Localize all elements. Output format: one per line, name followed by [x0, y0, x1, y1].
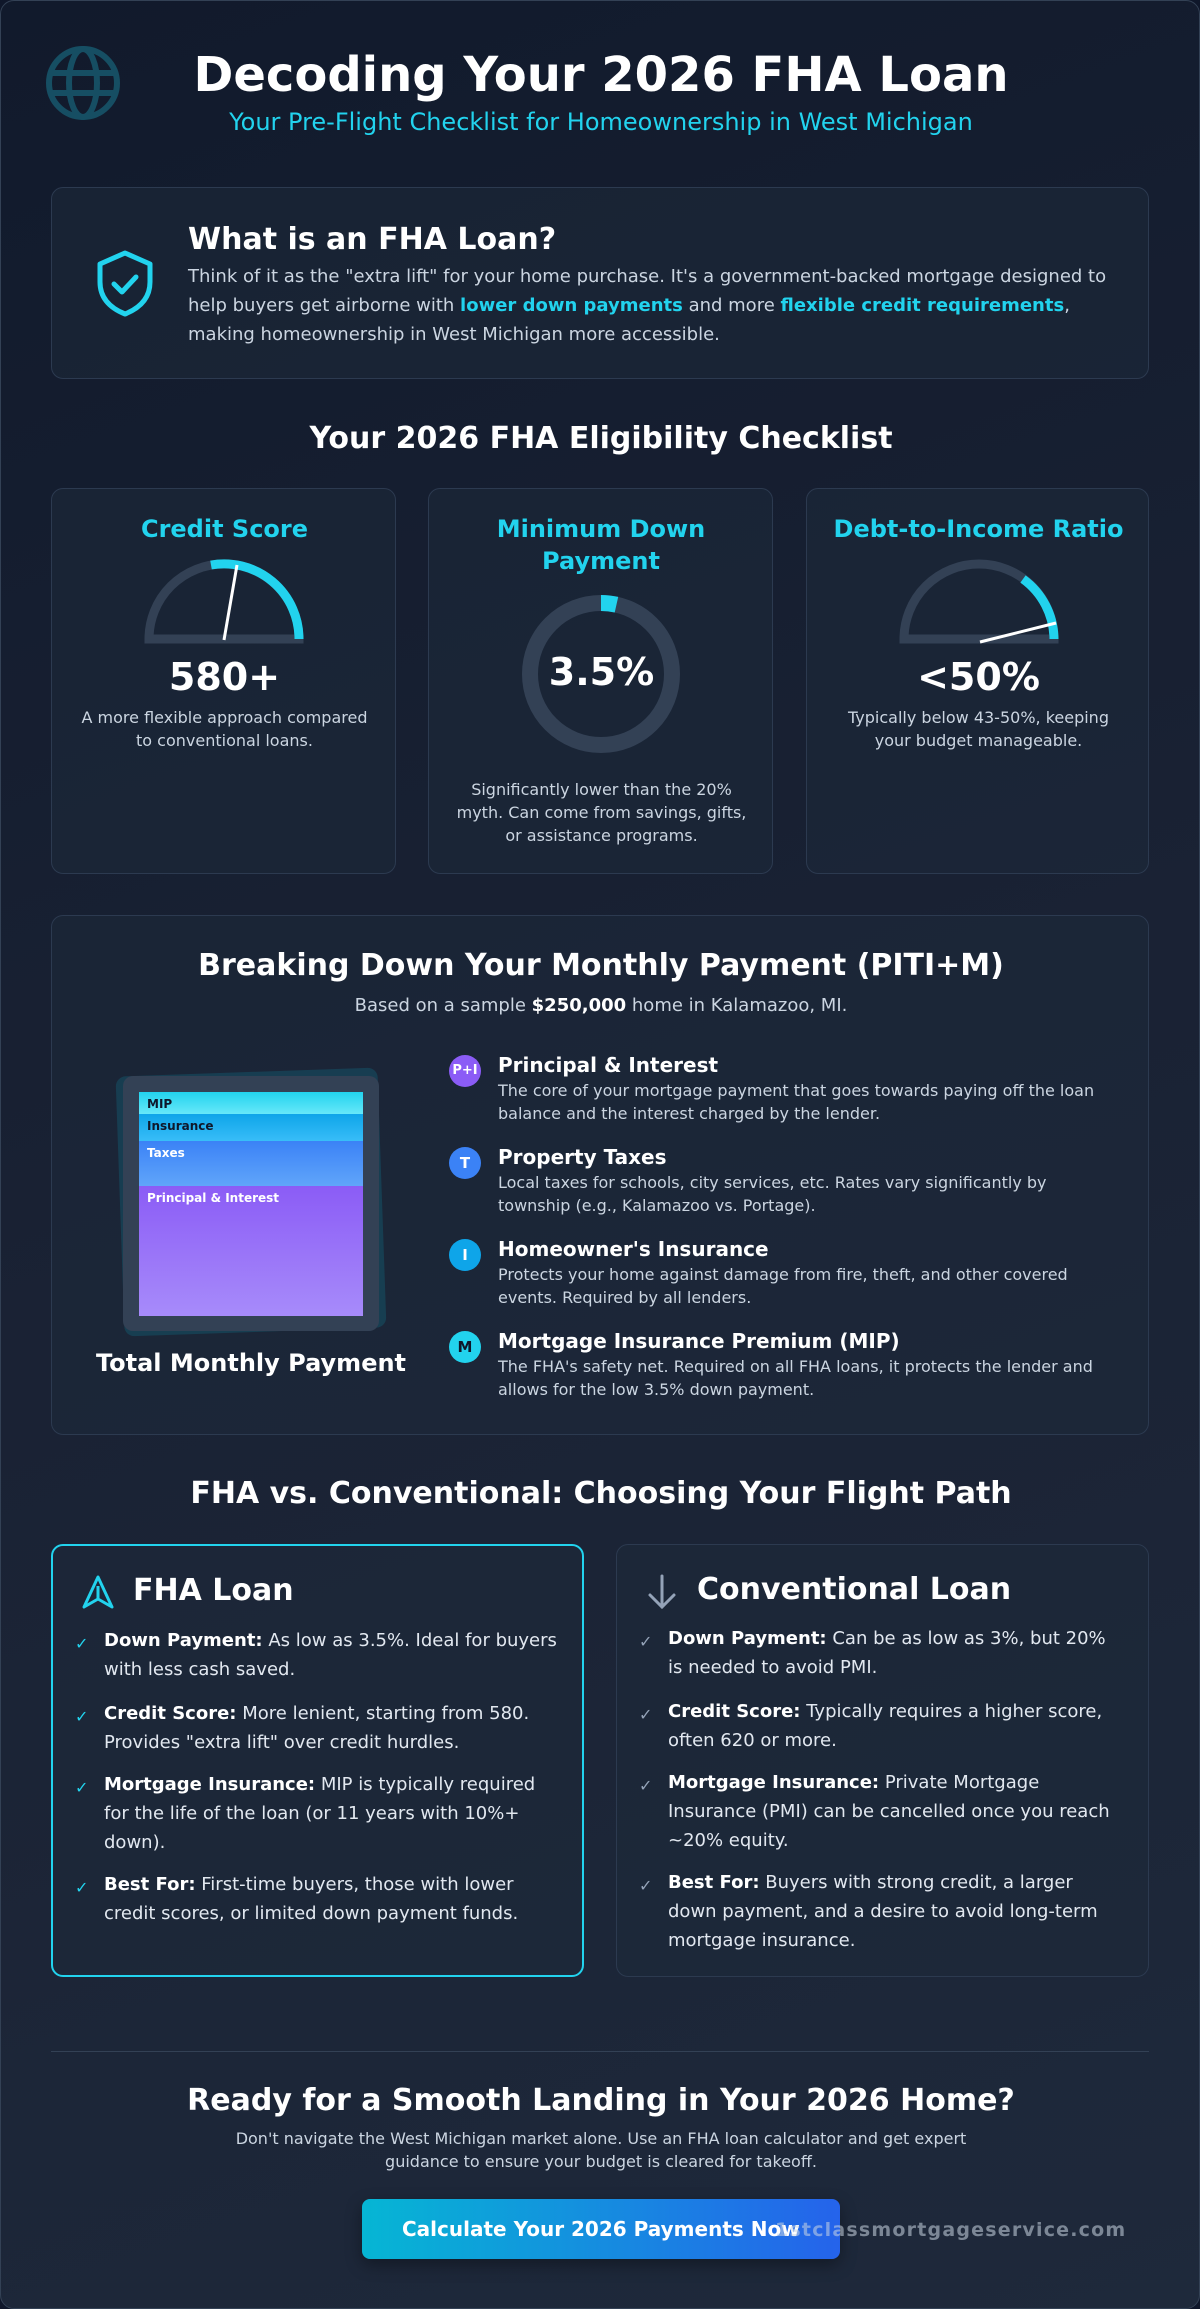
panel: conventional loan — [616, 1544, 1149, 1977]
stacked payment chart: MIP — [147, 1097, 172, 1111]
list item: property taxes: Local taxes for schools, city services, etc. Rates vary significantly by township (e.g., Kalamazoo vs. Portage). — [498, 1173, 1046, 1215]
items: ✓ — [75, 1707, 88, 1726]
icon: plane — [82, 1576, 114, 1609]
card title: Credit Score — [141, 515, 308, 543]
items — [75, 1630, 557, 1924]
heading: comparison: FHA vs. Conventional: Choosing Your Flight Path — [190, 1476, 1012, 1511]
gauge: credit — [144, 559, 304, 644]
card title: Debt-to-Income Ratio — [834, 515, 1123, 543]
panel: monthly payment — [51, 915, 1149, 1435]
watermark: 1stclassmortgageservice.com — [775, 2219, 1126, 2241]
items: Mortgage Insurance: MIP is typically required for the life of the loan (or 11 years with 10%+ down). — [104, 1774, 535, 1853]
list item: insurance — [449, 1237, 1068, 1307]
donut chart — [522, 595, 680, 753]
list item: MIP — [449, 1329, 1093, 1399]
value: <50% — [917, 655, 1040, 699]
box title: Conventional Loan — [697, 1572, 1011, 1607]
stacked payment chart: Insurance — [147, 1119, 214, 1133]
text: definition: Think of it as the "extra lift" for your home purchase. It's a government-backed mortgage designed to help buyers get airborne with lower down payments and more flexible credit requirements, making homeownership in West Michigan more accessible. — [188, 266, 1106, 345]
label: total monthly payment: Total Monthly Payment — [96, 1349, 406, 1377]
stacked payment chart: Taxes — [147, 1146, 185, 1160]
items — [639, 1628, 1110, 1951]
items: ✓ — [75, 1778, 88, 1797]
button: calculate: Calculate Your 2026 Payments Now — [402, 2217, 800, 2241]
stacked payment chart: Principal & Interest — [147, 1191, 279, 1205]
heading: what is: What is an FHA Loan? — [188, 222, 556, 257]
list item: MIP: M — [458, 1338, 472, 1356]
box title: FHA Loan — [133, 1573, 294, 1608]
items: Mortgage Insurance: Private Mortgage Insurance (PMI) can be cancelled once you reach ~20% equity. — [668, 1772, 1110, 1851]
title: Decoding Your 2026 FHA Loan — [193, 47, 1008, 103]
stacked payment chart — [116, 1068, 386, 1336]
subtitle: Your Pre-Flight Checklist for Homeownership in West Michigan — [229, 108, 973, 136]
items: ✓ — [639, 1632, 652, 1651]
items: Best For: First-time buyers, those with lower credit scores, or limited down payment funds. — [104, 1874, 518, 1924]
panel: down payment — [428, 488, 773, 874]
heading: checklist: Your 2026 FHA Eligibility Checklist — [309, 421, 893, 456]
card title: Minimum Down Payment — [497, 515, 705, 575]
panel: DTI — [806, 488, 1149, 874]
items: Credit Score: Typically requires a higher score, often 620 or more. — [668, 1701, 1102, 1751]
items: Credit Score: More lenient, starting from 580. Provides "extra lift" over credit hurdles. — [104, 1703, 529, 1753]
desc: A more flexible approach compared to conventional loans. — [82, 708, 367, 750]
items: Down Payment: Can be as low as 3%, but 20% is needed to avoid PMI. — [668, 1628, 1106, 1678]
list item: principal & interest: The core of your mortgage payment that goes towards paying off the loan balance and the interest charged by the lender. — [498, 1081, 1094, 1123]
list item: MIP: The FHA's safety net. Required on all FHA loans, it protects the lender and allows for the low 3.5% down payment. — [498, 1357, 1093, 1399]
list item: insurance: Homeowner's Insurance — [498, 1237, 769, 1261]
list item: MIP: Mortgage Insurance Premium (MIP) — [498, 1329, 900, 1353]
value: 580+ — [169, 655, 280, 699]
heading: Breaking Down Your Monthly Payment (PITI+M) — [198, 948, 1004, 983]
value: 3.5% — [549, 650, 654, 694]
list item: insurance: I — [462, 1246, 468, 1264]
panel: FHA loan — [51, 1544, 584, 1977]
icon: globe — [46, 46, 120, 120]
panel: credit score — [51, 488, 396, 874]
subtitle: Based on a sample $250,000 home in Kalamazoo, MI. — [355, 995, 847, 1016]
items: Best For: Buyers with strong credit, a larger down payment, and a desire to avoid long-term mortgage insurance. — [668, 1872, 1098, 1951]
items: ✓ — [639, 1876, 652, 1895]
items: ✓ — [75, 1634, 88, 1653]
items: ✓ — [75, 1878, 88, 1897]
text: CTA: Don't navigate the West Michigan market alone. Use an FHA loan calculator and get expert guidance to ensure your budget is cleared for takeoff. — [236, 2129, 966, 2171]
desc: Significantly lower than the 20% myth. Can come from savings, gifts, or assistance programs. — [457, 780, 746, 845]
items: ✓ — [639, 1776, 652, 1795]
gauge: DTI — [900, 560, 1058, 644]
items: Down Payment: As low as 3.5%. Ideal for buyers with less cash saved. — [104, 1630, 557, 1680]
button: calculate — [362, 2199, 840, 2259]
list item: property taxes — [449, 1145, 1046, 1215]
list item: principal & interest — [449, 1053, 1094, 1123]
heading: CTA: Ready for a Smooth Landing in Your 2026 Home? — [187, 2083, 1015, 2118]
desc: Typically below 43-50%, keeping your budget manageable. — [848, 708, 1109, 750]
icon: down arrow — [648, 1574, 676, 1609]
items: ✓ — [639, 1705, 652, 1724]
list item: principal & interest: P+I — [452, 1063, 478, 1078]
list item: property taxes: T — [460, 1154, 470, 1172]
panel: what is an FHA loan — [51, 187, 1149, 379]
list item: principal & interest: Principal & Interest — [498, 1053, 718, 1077]
list item: insurance: Protects your home against damage from fire, theft, and other covered events. Required by all lenders. — [498, 1265, 1068, 1307]
list item: property taxes: Property Taxes — [498, 1145, 666, 1169]
icon: shield — [98, 250, 152, 316]
